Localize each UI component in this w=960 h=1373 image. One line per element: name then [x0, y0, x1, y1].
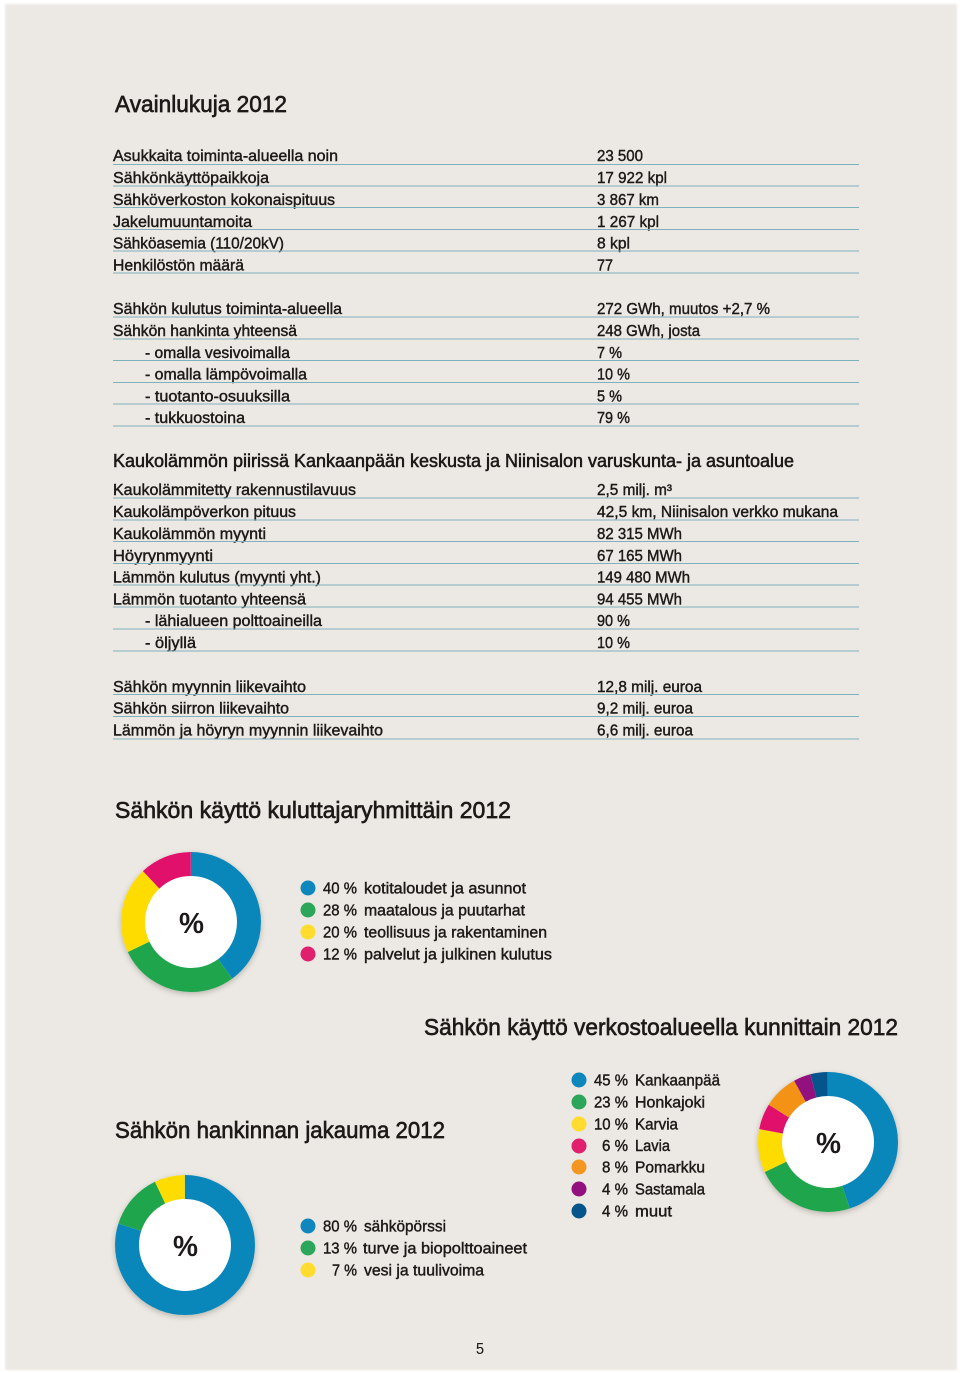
- legend item: hydro and wind: [300, 1262, 484, 1280]
- heading: district heating area: Kaukolämmön piirissä Kankaanpään keskusta ja Niinisalon varuskunta- ja asuntoalue: [113, 451, 794, 471]
- row: electricity sales turnover: [113, 679, 859, 696]
- row: electricity transmission turnover: 9,2 milj. euroa: [597, 700, 693, 718]
- legend item: Sastamala: [572, 1182, 705, 1198]
- row: heating network length: [113, 504, 859, 521]
- title: consumption by customer group: Sähkön käyttö kuluttajaryhmittäin 2012: [115, 797, 511, 823]
- row: heat production: 94 455 MWh: [597, 592, 682, 608]
- row: oil: - öljyllä: [145, 635, 196, 652]
- row: own thermal: 10 %: [597, 366, 630, 384]
- row: procurement total: 248 GWh, josta: [597, 323, 700, 340]
- row: electricity sales turnover: Sähkön myynnin liikevaihto: [113, 679, 306, 696]
- row: oil: [113, 635, 859, 652]
- legend item: agriculture: 28 %: [323, 902, 357, 920]
- legend item: peat and biofuels: [300, 1240, 528, 1258]
- row: steam sales: Höyrynmyynti: [113, 548, 213, 565]
- legend item: industry: teollisuus ja rakentaminen: [364, 924, 547, 942]
- row: consumption: Sähkön kulutus toiminta-alueella: [113, 301, 342, 318]
- legend item: services: 12 %: [323, 946, 357, 964]
- row: network length: [113, 192, 859, 209]
- donut chart: municipalities: %: [816, 1128, 841, 1160]
- legend: procurement: [300, 1218, 528, 1280]
- row: heat consumption: 149 480 MWh: [597, 570, 690, 586]
- legend item: Sastamala: 4 %: [602, 1182, 628, 1198]
- row: personnel: 77: [597, 258, 613, 274]
- row: steam sales: [113, 548, 859, 565]
- legend item: Pomarkku: 8 %: [602, 1160, 628, 1176]
- row: production shares: - tuotanto-osuuksilla: [145, 388, 290, 406]
- legend item: peat and biofuels: 13 %: [323, 1240, 357, 1258]
- legend item: industry: 20 %: [323, 924, 357, 942]
- row: local fuels: - lähialueen polttoaineilla: [145, 613, 322, 630]
- row: own thermal: - omalla lämpövoimalla: [145, 366, 307, 384]
- table: turnover: [113, 679, 859, 740]
- donut chart: consumer groups: [121, 852, 261, 994]
- legend item: Lavia: [572, 1138, 670, 1155]
- page number: 5: [476, 1341, 484, 1358]
- row: points of use: [113, 170, 859, 187]
- row: oil: 10 %: [597, 635, 630, 652]
- row: points of use: 17 922 kpl: [597, 170, 667, 187]
- legend item: Pomarkku: [572, 1160, 705, 1176]
- row: heat consumption: Lämmön kulutus (myynti yht.): [113, 570, 321, 586]
- table: district heating: [113, 482, 859, 652]
- legend item: Pomarkku: Pomarkku: [635, 1160, 705, 1176]
- row: network length: 3 867 km: [597, 192, 659, 209]
- legend item: households: 40 %: [323, 880, 357, 898]
- legend item: others: muut: [635, 1204, 673, 1220]
- row: heating sales: [113, 526, 859, 543]
- row: electricity transmission turnover: Sähkön siirron liikevaihto: [113, 700, 289, 718]
- legend item: Kankaanpää: [572, 1072, 720, 1090]
- legend item: Kankaanpää: 45 %: [594, 1072, 628, 1090]
- legend item: households: [300, 880, 527, 898]
- row: consumption: [113, 301, 859, 318]
- legend item: power exchange: [300, 1218, 446, 1236]
- table: general key figures: [113, 148, 859, 274]
- row: heated building volume: Kaukolämmitetty rakennustilavuus: [113, 482, 356, 499]
- donut chart: procurement: %: [173, 1231, 198, 1263]
- row: electricity transmission turnover: [113, 700, 859, 718]
- row: heat and steam turnover: 6,6 milj. euroa: [597, 722, 693, 740]
- legend item: Honkajoki: [572, 1094, 705, 1112]
- row: inhabitants: Asukkaita toiminta-alueella noin: [113, 148, 338, 165]
- row: heat consumption: [113, 570, 859, 586]
- donut chart: consumer groups: %: [179, 908, 204, 940]
- row: procurement total: Sähkön hankinta yhteensä: [113, 323, 297, 340]
- row: network length: Sähköverkoston kokonaispituus: [113, 192, 335, 209]
- legend item: services: palvelut ja julkinen kulutus: [364, 946, 552, 964]
- row: personnel: Henkilöstön määrä: [113, 258, 244, 274]
- legend item: Lavia: 6 %: [602, 1138, 628, 1155]
- legend item: power exchange: 80 %: [323, 1218, 357, 1236]
- legend: consumer groups: [300, 880, 552, 964]
- row: wholesale: - tukkuostoina: [145, 410, 245, 427]
- row: production shares: 5 %: [597, 388, 622, 406]
- row: local fuels: 90 %: [597, 613, 630, 630]
- row: steam sales: 67 165 MWh: [597, 548, 682, 565]
- row: own hydro: - omalla vesivoimalla: [145, 345, 290, 362]
- legend item: Honkajoki: 23 %: [594, 1094, 628, 1112]
- legend item: hydro and wind: vesi ja tuulivoima: [364, 1262, 484, 1280]
- legend item: peat and biofuels: turve ja biopolttoaineet: [363, 1240, 528, 1258]
- row: production shares: [113, 388, 859, 406]
- donut chart: municipalities: [758, 1072, 898, 1214]
- row: heated building volume: 2,5 milj. m³: [597, 482, 672, 499]
- row: heat production: Lämmön tuotanto yhteensä: [113, 592, 306, 608]
- legend item: Lavia: Lavia: [635, 1138, 670, 1155]
- row: inhabitants: 23 500: [597, 148, 643, 165]
- row: heat production: [113, 592, 859, 608]
- row: own thermal: [113, 366, 859, 384]
- row: personnel: [113, 258, 859, 274]
- legend item: households: kotitaloudet ja asunnot: [364, 880, 527, 898]
- legend item: others: 4 %: [602, 1204, 628, 1220]
- row: substations: Sähköasemia (110/20kV): [113, 236, 284, 252]
- row: transformers: [113, 214, 859, 231]
- donut chart: procurement: [115, 1175, 255, 1317]
- legend item: others: [572, 1204, 673, 1220]
- row: wholesale: [113, 410, 859, 427]
- legend item: Karvia: 10 %: [594, 1116, 628, 1134]
- legend item: Honkajoki: Honkajoki: [635, 1094, 705, 1112]
- row: substations: 8 kpl: [597, 236, 630, 252]
- row: heating network length: 42,5 km, Niinisalon verkko mukana: [597, 504, 838, 521]
- row: inhabitants: [113, 148, 859, 165]
- legend item: Karvia: [572, 1116, 678, 1134]
- row: local fuels: [113, 613, 859, 630]
- row: heat and steam turnover: [113, 722, 859, 740]
- legend item: Sastamala: Sastamala: [635, 1182, 705, 1198]
- row: points of use: Sähkönkäyttöpaikkoja: [113, 170, 269, 187]
- legend item: Karvia: Karvia: [635, 1116, 678, 1134]
- row: heated building volume: [113, 482, 859, 499]
- legend item: hydro and wind: 7 %: [332, 1262, 357, 1280]
- legend: municipalities: [572, 1072, 720, 1220]
- legend item: Kankaanpää: Kankaanpää: [635, 1072, 720, 1090]
- row: consumption: 272 GWh, muutos +2,7 %: [597, 301, 770, 318]
- row: heating sales: 82 315 MWh: [597, 526, 682, 543]
- legend item: agriculture: maatalous ja puutarhat: [364, 902, 526, 920]
- legend item: power exchange: sähköpörssi: [364, 1218, 446, 1236]
- row: heating network length: Kaukolämpöverkon pituus: [113, 504, 296, 521]
- title: electricity procurement: Sähkön hankinnan jakauma 2012: [115, 1117, 445, 1143]
- row: transformers: 1 267 kpl: [597, 214, 659, 231]
- row: own hydro: [113, 345, 859, 362]
- row: procurement total: [113, 323, 859, 340]
- table: electricity consumption and procurement: [113, 301, 859, 427]
- row: substations: [113, 236, 859, 252]
- row: electricity sales turnover: 12,8 milj. euroa: [597, 679, 702, 696]
- row: heating sales: Kaukolämmön myynti: [113, 526, 266, 543]
- row: heat and steam turnover: Lämmön ja höyryn myynnin liikevaihto: [113, 722, 383, 740]
- title: Avainlukuja 2012: Avainlukuja 2012: [115, 91, 287, 117]
- row: own hydro: 7 %: [597, 345, 622, 362]
- row: transformers: Jakelumuuntamoita: [113, 214, 252, 231]
- row: wholesale: 79 %: [597, 410, 630, 427]
- title: consumption by municipality: Sähkön käyttö verkostoalueella kunnittain 2012: [424, 1014, 898, 1040]
